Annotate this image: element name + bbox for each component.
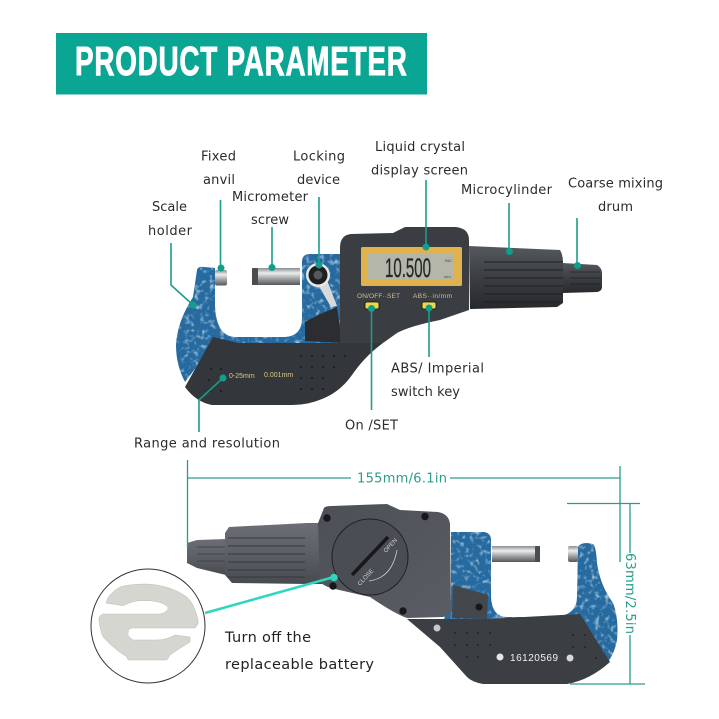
wedge xyxy=(452,585,488,619)
wedge xyxy=(305,307,342,343)
fixed anvil part xyxy=(215,270,227,286)
callout: on set: On /SET xyxy=(345,418,398,434)
microcylinder knob xyxy=(469,246,563,309)
LCD screen: 10.500 xyxy=(385,253,431,283)
screws xyxy=(323,513,429,615)
battery shim plate xyxy=(99,584,198,660)
callout: abs imperial switch key xyxy=(391,304,484,400)
blue C-frame xyxy=(176,254,342,382)
dimension: height xyxy=(567,504,645,684)
callout: fixed anvil xyxy=(201,150,236,272)
callout: range and resolution xyxy=(134,374,280,452)
black lower grip: 0-25mm xyxy=(229,373,255,380)
callout: microcylinder: Microcylinder xyxy=(461,183,553,198)
grip: 16120569 xyxy=(510,653,558,664)
dimension: length: 155mm/6.1in xyxy=(357,472,447,486)
callout: liquid crystal display: Liquid crystal xyxy=(375,140,465,155)
callout: abs imperial switch key: ABS/ Imperial xyxy=(391,362,484,376)
battery caption: replaceable battery xyxy=(225,657,374,673)
battery cover: CLOSE xyxy=(357,568,375,587)
coarse drum xyxy=(563,263,602,293)
callout: locking device xyxy=(293,150,345,268)
callout: micrometer screw xyxy=(232,190,309,271)
battery circle xyxy=(91,569,205,683)
abs button xyxy=(422,302,436,309)
body xyxy=(318,504,451,618)
callout: range and resolution: Range and resolution xyxy=(134,436,280,452)
dimension: length xyxy=(187,460,620,562)
grip xyxy=(407,614,610,684)
callout: fixed anvil: Fixed xyxy=(201,150,236,164)
button labels: ON/OFF··SET xyxy=(357,293,400,300)
callout: fixed anvil: anvil xyxy=(203,173,235,188)
LCD screen: mm xyxy=(444,274,451,279)
battery cover xyxy=(332,519,408,595)
callout: scale holder: holder xyxy=(148,224,193,239)
title banner: PRODUCT PARAMETER xyxy=(75,39,407,84)
black lower grip xyxy=(185,337,383,405)
callout: coarse mixing drum: Coarse mixing xyxy=(568,176,663,192)
top micrometer illustration xyxy=(176,227,602,405)
LCD screen: INC xyxy=(445,258,452,263)
connector line xyxy=(205,577,334,613)
battery callout xyxy=(91,569,338,683)
dimension: height: 63mm/2.5in xyxy=(622,553,637,634)
callout: scale holder xyxy=(148,200,196,308)
battery cover: OPEN xyxy=(383,538,399,554)
display body xyxy=(340,227,469,343)
callout: abs imperial switch key: switch key xyxy=(391,385,460,400)
battery caption xyxy=(224,630,374,673)
callout: locking device: Locking xyxy=(293,150,345,164)
locking device xyxy=(306,263,337,307)
callout: liquid crystal display xyxy=(371,140,468,250)
display body: ABS··in/mm xyxy=(413,293,452,300)
microcylinder knob xyxy=(225,523,322,584)
callout: scale holder: Scale xyxy=(152,200,187,215)
callout: on set xyxy=(345,305,398,434)
anvil xyxy=(568,546,578,562)
callout: liquid crystal display: display screen xyxy=(371,164,468,178)
title banner xyxy=(56,33,427,94)
battery caption: Turn off the xyxy=(224,630,311,646)
callout: locking device: device xyxy=(297,173,340,188)
bottom micrometer illustration xyxy=(187,504,618,684)
micrometer screw part xyxy=(252,268,300,285)
coarse drum xyxy=(187,539,226,575)
spindle xyxy=(492,546,540,562)
on/set button xyxy=(365,302,379,309)
callout: microcylinder xyxy=(461,183,553,255)
callout: coarse mixing drum: drum xyxy=(598,200,633,215)
LCD screen xyxy=(361,247,462,286)
callout: coarse mixing drum xyxy=(568,176,663,269)
blue C-frame xyxy=(440,532,618,662)
callout: micrometer screw: Micrometer xyxy=(232,190,309,205)
callout: micrometer screw: screw xyxy=(251,213,289,228)
black lower grip: 0.001mm xyxy=(264,372,293,379)
